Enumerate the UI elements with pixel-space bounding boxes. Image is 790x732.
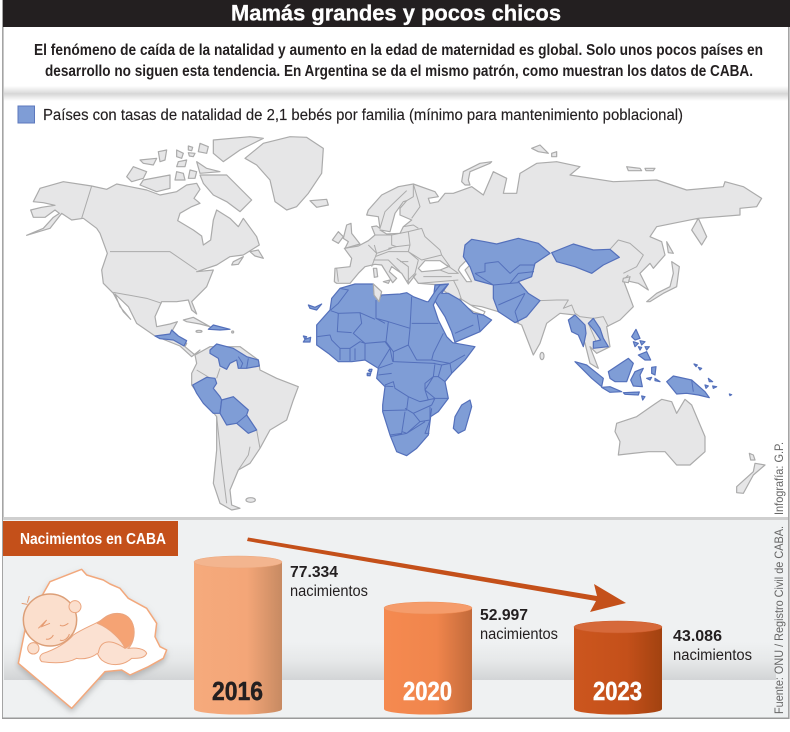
Asian borders	[423, 240, 643, 347]
Eurasia	[334, 162, 762, 368]
New Zealand	[737, 453, 765, 493]
Baltic, Black and Caspian seas	[380, 201, 412, 234]
bar: 2023	[574, 621, 662, 714]
European borders	[337, 184, 458, 283]
Philippines	[632, 329, 651, 360]
value: 52.997: 52.997	[480, 607, 528, 624]
value: 52.997	[480, 607, 558, 643]
Australia	[615, 399, 705, 465]
Canary and Cape Verde	[303, 304, 372, 376]
panel: births in CABA	[2, 517, 789, 719]
Greenland and Iceland	[245, 137, 328, 210]
Peru	[193, 377, 222, 413]
South America	[192, 347, 298, 510]
bar: 2020	[384, 602, 472, 714]
world map	[27, 137, 765, 510]
value: 77.334: nacimientos	[290, 583, 368, 600]
bar: 2020: 2020	[403, 676, 452, 706]
Sao Tome	[367, 369, 372, 376]
Myanmar	[568, 315, 586, 347]
Madagascar	[453, 400, 472, 433]
bar: 2016	[194, 556, 282, 714]
Venezuela and Guianas	[210, 344, 259, 369]
Tunisia	[373, 284, 382, 302]
arrow: decline	[247, 538, 626, 612]
arctic islands	[127, 137, 263, 265]
diaper	[97, 614, 134, 648]
face and hair	[22, 596, 69, 640]
Central America blue	[155, 330, 187, 346]
value: 43.086	[673, 628, 752, 664]
Laos and Cambodia	[588, 318, 608, 348]
Arabia and Levant	[433, 284, 492, 342]
bar: 2016: 2016	[212, 676, 263, 706]
legend: Países con tasas de natalidad de 2,1 bebés por familia (mínimo para mantenimiento poblacional)	[43, 107, 683, 124]
North America	[27, 182, 259, 357]
Arctic and Pacific islands	[532, 145, 655, 283]
New Guinea	[667, 376, 709, 398]
credit: infographic: Infografía: G.P.	[772, 442, 786, 515]
African borders	[317, 288, 465, 437]
Eurasia and Oceania	[332, 145, 765, 493]
Novaya Zemlya	[462, 162, 492, 185]
value: 43.086: 43.086	[673, 628, 722, 645]
Africa	[317, 284, 475, 456]
Mongolia	[552, 244, 619, 273]
value: 77.334: 77.334	[290, 564, 338, 581]
Americas	[27, 137, 372, 510]
Central and South Asia	[463, 238, 619, 348]
bar: 2023: 2023	[593, 676, 642, 706]
ears	[69, 601, 81, 613]
Britain and islands	[332, 223, 390, 283]
value: 43.086: nacimientos	[673, 647, 752, 664]
value: 77.334	[290, 564, 368, 600]
intro text	[34, 42, 763, 80]
Bolivia and Paraguay	[220, 397, 257, 433]
head	[23, 594, 77, 646]
credit: source: Fuente: ONU / Registro Civil de CABA.	[772, 526, 786, 714]
canada-usa-mexico borders	[82, 186, 197, 303]
value: 52.997: nacimientos	[480, 626, 558, 643]
icon: sleeping baby on CABA map	[18, 569, 167, 708]
panel heading: Nacimientos en CABA	[20, 531, 166, 548]
Persian gulf	[460, 298, 485, 315]
Indonesia	[575, 362, 645, 400]
title bar	[3, 0, 790, 27]
Cuba and Caribbean	[183, 317, 210, 327]
Kazakhstan and Central Asia	[463, 238, 550, 323]
panel heading	[3, 521, 178, 556]
title bar: Mamás grandes y pocos chicos	[231, 0, 561, 26]
body	[40, 613, 147, 665]
